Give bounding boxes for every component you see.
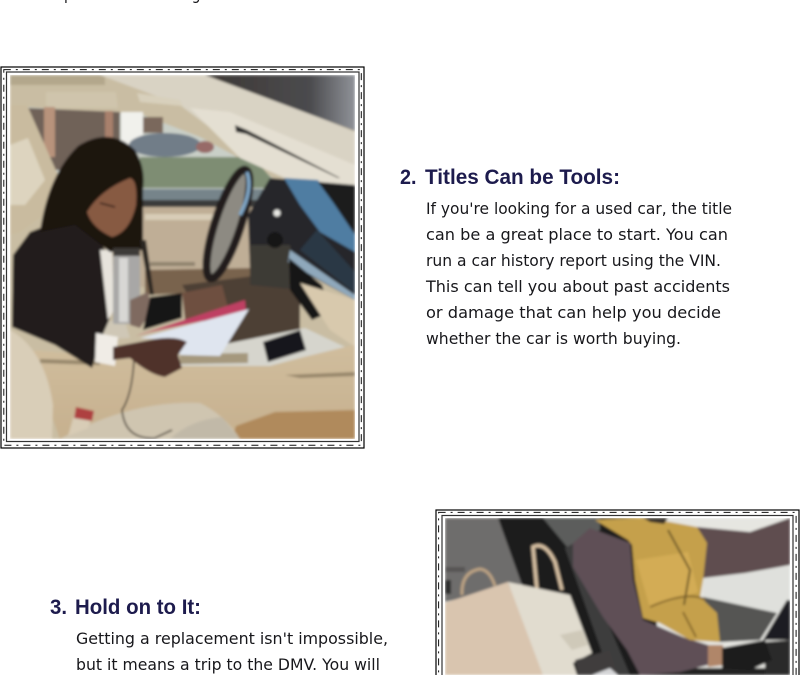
bag handles bbox=[462, 569, 495, 595]
text block: section 3 body bbox=[76, 629, 388, 674]
hand bbox=[113, 338, 187, 377]
photo: driver, paper bag, travel cup bbox=[445, 518, 790, 675]
sleeve bbox=[573, 528, 708, 675]
text block: section 3 body: but it means a trip to the DMV. You will bbox=[76, 655, 380, 674]
dashboard and wheel bbox=[703, 597, 777, 642]
text block: section 2 body: can be a great place to start. You can bbox=[426, 225, 728, 244]
text block: section 2 body: This can tell you about past accidents bbox=[425, 277, 730, 296]
heading: 2. Titles Can be Tools: 2. bbox=[400, 166, 416, 189]
passenger seat bbox=[10, 330, 53, 439]
photo: woman reading papers in car bbox=[10, 75, 355, 439]
centre console bbox=[44, 360, 355, 438]
heading: 3. Hold on to It: Hold on to It: bbox=[75, 596, 201, 619]
steering wheel bbox=[198, 166, 258, 282]
bag bbox=[445, 582, 543, 675]
travel cup bbox=[574, 652, 608, 675]
text block: section 2 body: whether the car is worth buying. bbox=[426, 329, 681, 348]
right arm bbox=[697, 518, 790, 578]
hair bbox=[40, 137, 144, 252]
photo frame: driver with shopping bag bbox=[436, 510, 799, 675]
gap and seat band bbox=[498, 518, 660, 675]
thermos bbox=[113, 251, 140, 324]
text block: section 2 body: or damage that can help you decide bbox=[426, 303, 721, 322]
vest bbox=[595, 518, 720, 642]
text block: section 2 body bbox=[425, 199, 732, 348]
text block: section 2 body: If you're looking for a used car, the title bbox=[426, 199, 732, 218]
left pillar bbox=[28, 109, 60, 194]
window bbox=[27, 107, 285, 190]
heading: 2. Titles Can be Tools: Titles Can be Tools: bbox=[425, 166, 620, 189]
photo frame: woman in car bbox=[1, 67, 364, 448]
heading: 3. Hold on to It: 3. bbox=[50, 596, 67, 619]
text block: section 3 body: Getting a replacement isn't impossible, bbox=[76, 629, 388, 648]
hand and glove bbox=[708, 645, 724, 667]
white pillar band bbox=[190, 108, 355, 190]
back seat bbox=[445, 518, 523, 602]
armrest bbox=[103, 320, 130, 338]
woman bbox=[12, 212, 110, 368]
text block: section 2 body: run a car history report using the VIN. bbox=[426, 251, 721, 270]
folder and papers bbox=[135, 300, 246, 336]
door bbox=[140, 206, 252, 287]
dashboard bbox=[248, 178, 355, 300]
